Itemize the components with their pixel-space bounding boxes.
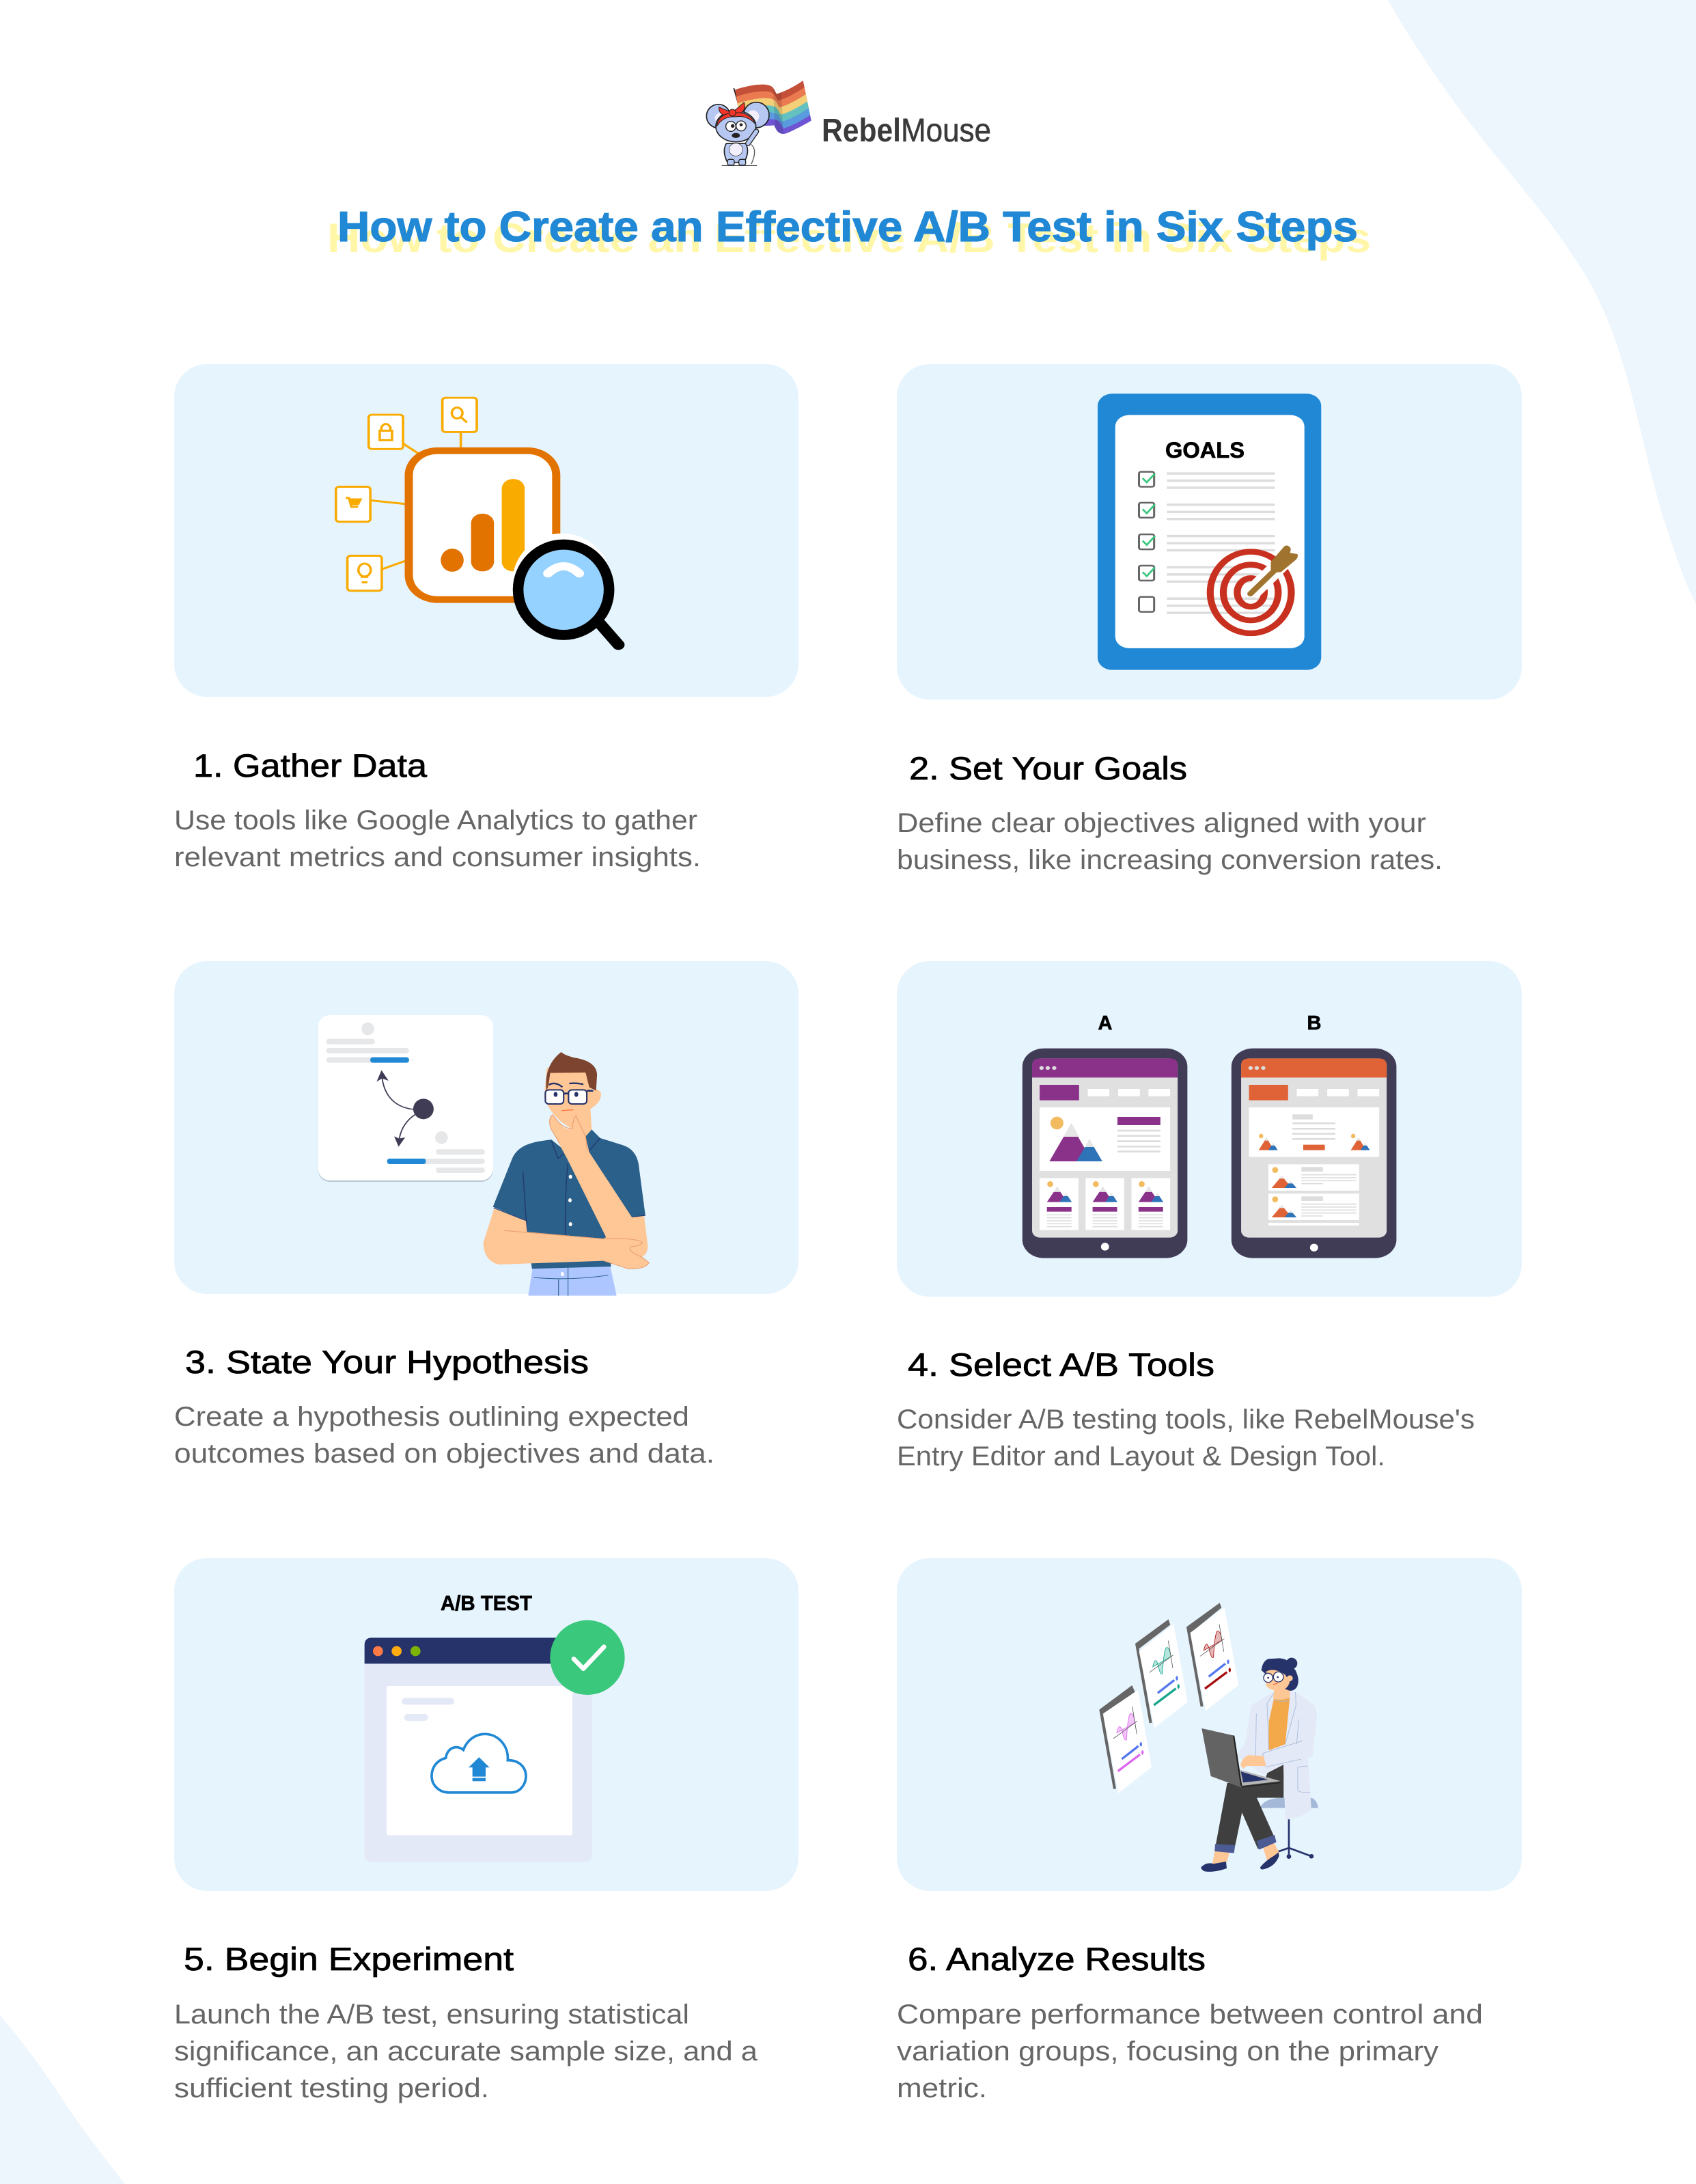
body text — [897, 2000, 1483, 2103]
body text — [174, 2000, 758, 2103]
body text: Create a hypothesis outlining expected — [174, 1402, 689, 1432]
wordmark — [822, 113, 991, 149]
body text: outcomes based on objectives and data. — [174, 1439, 714, 1469]
tablet A — [1023, 1049, 1187, 1258]
body text — [174, 805, 701, 872]
illustration: browser window with upload cloud — [365, 1591, 625, 1862]
background blob: bottom left — [0, 2015, 125, 2184]
panel: step 5 begin experiment — [174, 1558, 798, 2103]
panel background — [897, 364, 1522, 700]
heading: 1. Gather Data — [193, 747, 428, 784]
body text: Define clear objectives aligned with your — [897, 808, 1426, 838]
heading: 3. State Your Hypothesis — [185, 1344, 589, 1380]
body text: Compare performance between control and — [897, 2000, 1483, 2030]
background blob: top right — [1388, 0, 1696, 604]
illustration: two tablets A and B — [1023, 1012, 1396, 1258]
body text: business, like increasing conversion rates. — [897, 845, 1443, 875]
panel: step 4 select A/B tools — [897, 961, 1522, 1471]
panel background — [897, 1558, 1522, 1891]
body text: significance, an accurate sample size, and a — [174, 2036, 758, 2066]
body text — [897, 808, 1443, 875]
illustration: thinking man and hypothesis card — [318, 1015, 649, 1296]
body text: sufficient testing period. — [174, 2073, 489, 2103]
panel background — [174, 961, 798, 1294]
body text: metric. — [897, 2073, 987, 2103]
illustration: two tablets A and B: A — [1098, 1012, 1113, 1034]
body text: Launch the A/B test, ensuring statistical — [174, 2000, 689, 2030]
illustration: analyst with floating charts — [1099, 1603, 1318, 1872]
analyst on chair with laptop — [1201, 1658, 1318, 1872]
heading: 5. Begin Experiment — [184, 1941, 514, 1977]
panel background — [174, 1558, 798, 1891]
body text: variation groups, focusing on the primary — [897, 2036, 1438, 2066]
tablet B — [1232, 1049, 1396, 1258]
title: How to Create an Effective A/B Test in Six Steps — [327, 215, 1371, 261]
illustration: goals checklist with target: GOALS — [1165, 438, 1245, 462]
heading: 6. Analyze Results — [908, 1941, 1206, 1977]
panel background — [174, 364, 798, 697]
title: How to Create an Effective A/B Test in Six Steps — [337, 204, 1358, 251]
hypothesis card — [318, 1015, 493, 1182]
body text: Use tools like Google Analytics to gather — [174, 805, 697, 835]
body text: Entry Editor and Layout & Design Tool. — [897, 1441, 1385, 1471]
panel background — [897, 961, 1522, 1297]
panel: step 6 analyze results — [897, 1558, 1522, 2103]
heading: 2. Set Your Goals — [909, 750, 1187, 786]
logo: RebelMouse — [706, 81, 990, 166]
panel: step 3 state your hypothesis — [174, 961, 798, 1469]
panel: step 1 gather data — [174, 364, 798, 872]
icon: mouse with rainbow flag — [706, 81, 811, 166]
body text — [897, 1405, 1475, 1471]
illustration: two tablets A and B: B — [1307, 1012, 1321, 1034]
illustration: goals checklist with target — [1098, 393, 1321, 670]
wordmark: Rebel — [822, 113, 901, 149]
heading: 4. Select A/B Tools — [908, 1346, 1214, 1383]
wordmark: Mouse — [901, 113, 991, 149]
body text — [174, 1402, 714, 1469]
thinking man — [483, 1052, 649, 1296]
body text: Consider A/B testing tools, like RebelMouse's — [897, 1405, 1475, 1435]
body text: relevant metrics and consumer insights. — [174, 842, 701, 872]
illustration: browser window with upload cloud: A/B TEST — [441, 1591, 532, 1615]
chart cards — [1099, 1603, 1238, 1793]
panel: step 2 set your goals — [897, 364, 1522, 875]
illustration: analytics app with magnifier — [336, 398, 618, 645]
